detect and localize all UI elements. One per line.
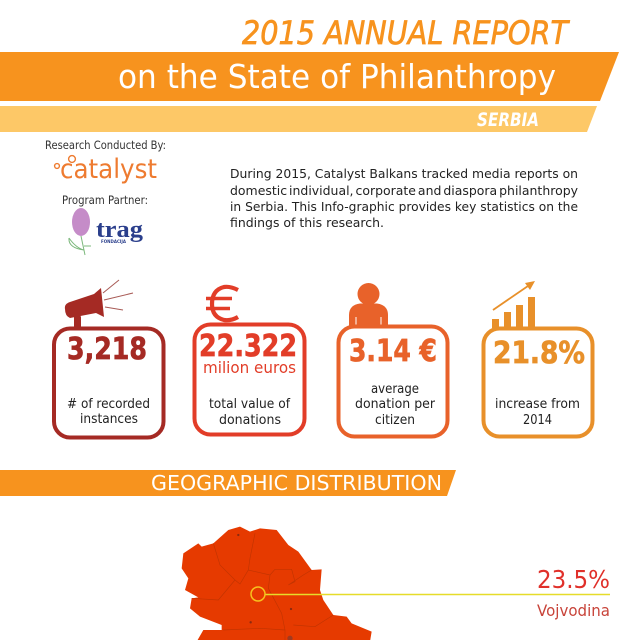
callout: Vojvodina xyxy=(251,565,610,620)
intro text: in Serbia. This Info-graphic provides key statistics on the xyxy=(230,199,578,214)
logo: trag: trag xyxy=(96,217,143,243)
panel: total value: donations xyxy=(219,413,281,428)
research credit xyxy=(45,138,166,255)
panel: recorded instances xyxy=(54,280,164,438)
logo: trag xyxy=(69,208,143,255)
panel: total value: 22.322 xyxy=(199,329,297,364)
panel: average donation xyxy=(338,283,448,436)
panel: average donation: citizen xyxy=(375,413,415,428)
panel: increase: 21.8% xyxy=(493,336,585,371)
panel: total value xyxy=(194,287,304,434)
section heading: geographic distribution xyxy=(0,470,456,496)
panel: total value: total value of xyxy=(209,397,290,412)
icon: megaphone xyxy=(65,280,133,328)
panel: average donation: donation per xyxy=(355,397,436,412)
research credit: Research Conducted By: xyxy=(45,138,166,152)
logo: catalyst: catalyst xyxy=(60,154,157,185)
panel: average donation: average xyxy=(371,382,419,397)
research credit: Program Partner: xyxy=(62,193,148,207)
section heading: geographic distribution: GEOGRAPHIC DISTRIBUTION xyxy=(151,471,442,495)
panel: increase: increase from xyxy=(495,397,580,412)
banner: subtitle: on the State of Philanthropy xyxy=(118,57,556,96)
panel: total value: milion euros xyxy=(203,358,296,377)
intro text: domestic individual, corporate and diaspora philanthropy xyxy=(230,183,579,198)
icon: growth chart xyxy=(492,281,535,328)
map of Serbia xyxy=(182,527,372,640)
banner: country xyxy=(0,106,597,132)
banner: subtitle xyxy=(0,52,619,101)
icon: person xyxy=(349,283,388,327)
panel: increase: 2014 xyxy=(523,413,552,428)
panel: average donation: 3.14 € xyxy=(349,334,437,369)
title: 2015 ANNUAL REPORT xyxy=(242,14,570,52)
intro text xyxy=(230,166,579,230)
panel: increase xyxy=(484,281,592,436)
panel: recorded instances: instances xyxy=(80,412,138,427)
panel: recorded instances: # of recorded xyxy=(67,397,150,412)
logo: trag: FONDACIJA xyxy=(101,239,126,245)
intro text: findings of this research. xyxy=(230,215,384,230)
icon: euro xyxy=(206,287,238,320)
banner: country: SERBIA xyxy=(477,109,539,131)
intro text: During 2015, Catalyst Balkans tracked media reports on xyxy=(230,166,578,181)
callout: Vojvodina: 23.5% xyxy=(537,565,610,594)
callout: Vojvodina: Vojvodina xyxy=(537,601,610,620)
panel: recorded instances: 3,218 xyxy=(67,332,147,367)
